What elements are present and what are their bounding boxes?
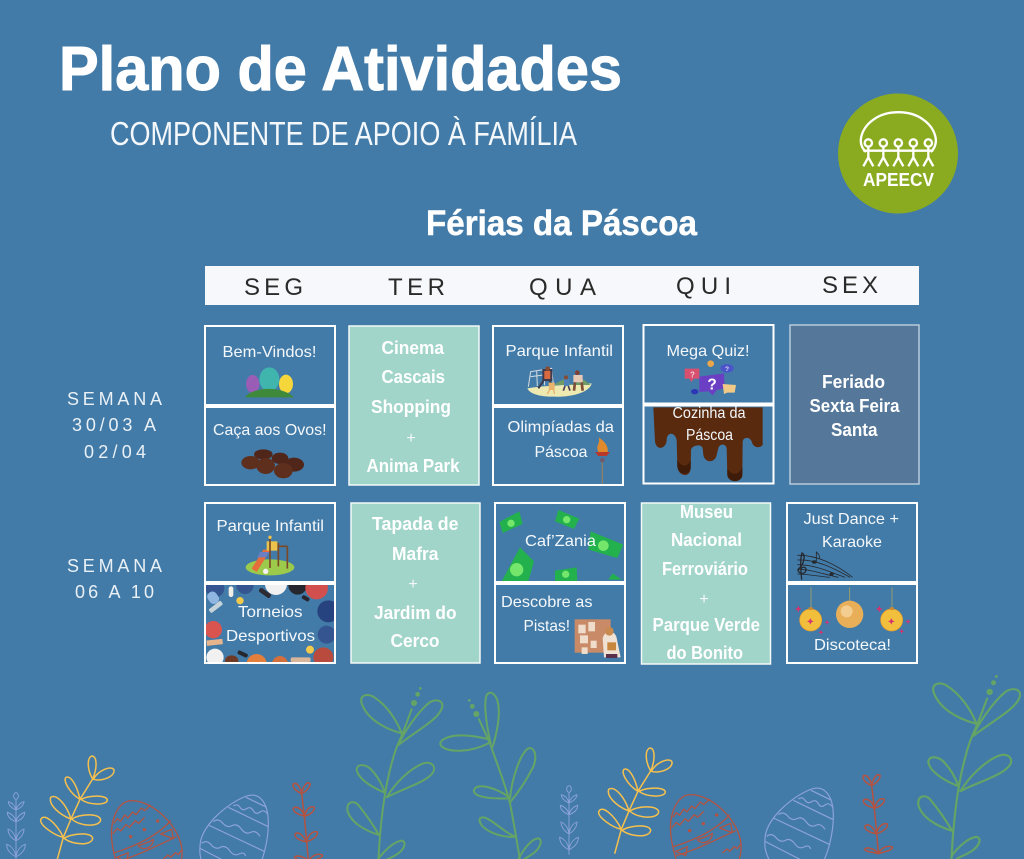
cell: Caça aos Ovos (205, 407, 335, 485)
cell: Museu Nacional Ferroviário + Parque Verde do Bonito: Nacional (671, 530, 742, 550)
weekday header bar: SEG (244, 274, 303, 301)
egg: red right (671, 795, 741, 859)
cell: Descobre as Pistas (495, 584, 625, 663)
cell: Caf'Zania: Caf’Zania (525, 533, 596, 550)
cell: Descobre as Pistas: Descobre as (501, 594, 592, 611)
cell: Cinema Cascais Shopping + Anima Park: Anima Park (366, 456, 460, 476)
cell: Mega Quiz (644, 325, 774, 404)
subtitle: COMPONENTE DE APOIO À FAMÍLIA (110, 115, 577, 152)
cell: Just Dance + Karaoke (787, 503, 917, 582)
cell: Olimpíadas da Páscoa: Páscoa (534, 444, 588, 461)
cell: Cinema Cascais Shopping + Anima Park (349, 326, 479, 485)
cell: Museu Nacional Ferroviário + Parque Verde do Bonito: Ferroviário (662, 559, 748, 579)
logo: APEECV: APEECV (863, 170, 934, 190)
week label: 30/03 a 02/04: 02/04 (84, 442, 146, 462)
egg: red left (112, 801, 182, 859)
plant: lavender right (560, 786, 578, 855)
cell: Torneios Desportivos (204, 583, 336, 664)
weekday header bar: QUI (676, 273, 731, 300)
cell: Olimpíadas da Páscoa: Olimpíadas da (508, 419, 614, 436)
week label: 30/03 a 02/04: SEMANA (67, 389, 162, 409)
cell: Parque Infantil (semana 1): Parque Infantil (506, 343, 613, 360)
cell: Just Dance + Karaoke: Just Dance + (804, 511, 899, 528)
icon: sports balls frame (206, 585, 334, 662)
cell: Feriado Sexta Feira Santa: Feriado (822, 372, 885, 392)
plant: green left (347, 687, 442, 859)
cell: Discoteca: Discoteca! (814, 637, 891, 654)
cell: Cozinha da Páscoa: Páscoa (686, 427, 733, 444)
egg: blue right (765, 788, 833, 859)
icon: playground (246, 536, 294, 575)
plant: yellow right (599, 748, 672, 854)
week label: 06 a 10: 06 A 10 (75, 582, 154, 602)
icon: question bubbles: ? (725, 366, 729, 373)
cell: Just Dance + Karaoke: Karaoke (822, 534, 882, 551)
cell: Caça aos Ovos: Caça aos Ovos! (213, 422, 326, 439)
cell: Tapada de Mafra + Jardim do Cerco: + (408, 576, 418, 593)
weekday header bar: TER (388, 274, 445, 301)
icon: painted eggs (245, 367, 294, 397)
cell: Torneios Desportivos: Desportivos (226, 628, 315, 645)
cell: Bem-Vindos (205, 326, 335, 405)
plant: green right (918, 675, 1020, 859)
cell: Olimpíadas da Páscoa (493, 407, 623, 485)
cell: Tapada de Mafra + Jardim do Cerco (351, 503, 480, 663)
cell: Museu Nacional Ferroviário + Parque Verde do Bonito (642, 502, 770, 664)
cell: Feriado Sexta Feira Santa: Sexta Feira (810, 396, 900, 416)
plant: yellow left (41, 756, 114, 859)
icon: flying banknotes (499, 510, 623, 581)
plant: green leaning (440, 693, 541, 859)
title: Plano de Atividades (59, 35, 622, 104)
cell: Mega Quiz: Mega Quiz! (666, 343, 750, 360)
cell: Cinema Cascais Shopping + Anima Park: Cascais (382, 367, 445, 387)
cell: Cozinha da Páscoa: Cozinha da (672, 405, 746, 422)
icon: detective evidence board (575, 619, 621, 658)
logo: APEECV (838, 94, 958, 214)
cell: Museu Nacional Ferroviário + Parque Verde do Bonito: do Bonito (666, 643, 743, 663)
cell: Parque Infantil (semana 2) (205, 503, 335, 582)
plant: red sprig left (293, 783, 322, 859)
week label: 06 a 10: SEMANA (67, 556, 162, 576)
cell: Cinema Cascais Shopping + Anima Park: + (406, 430, 416, 447)
cell: Cinema Cascais Shopping + Anima Park: Shopping (371, 397, 451, 417)
cell: Feriado Sexta Feira Santa: Santa (831, 420, 878, 440)
icon: chocolate drip (653, 407, 763, 481)
icon: question bubbles (685, 360, 736, 395)
cell: Parque Infantil (semana 1) (493, 326, 623, 405)
icon: question bubbles: ? (707, 376, 717, 393)
week label: 06 a 10 (67, 556, 162, 602)
cell: Tapada de Mafra + Jardim do Cerco: Cerco (390, 631, 440, 651)
cell: Descobre as Pistas: Pistas! (524, 618, 570, 635)
weekday header bar: QUA (529, 274, 596, 301)
cell: Torneios Desportivos: Torneios (238, 604, 302, 621)
cell: Cozinha da Páscoa (644, 405, 774, 484)
cell: Tapada de Mafra + Jardim do Cerco: Tapada de (372, 514, 458, 534)
plant: red sprig right (863, 775, 892, 854)
cell: Museu Nacional Ferroviário + Parque Verde do Bonito: Parque Verde (652, 615, 760, 635)
icon: question bubbles: ? (690, 370, 695, 379)
decoration: plants and Easter eggs (7, 675, 1020, 859)
icon: olympic torch (595, 437, 610, 484)
icon: music staff (797, 552, 853, 580)
egg: blue left (200, 795, 268, 859)
cell: Museu Nacional Ferroviário + Parque Verde do Bonito: Museu (680, 502, 733, 522)
weekday header bar: SEX (822, 272, 878, 299)
cell: Discoteca (787, 584, 917, 663)
cell: Feriado Sexta Feira Santa (790, 325, 919, 484)
cell: Tapada de Mafra + Jardim do Cerco: Jardim do (374, 603, 456, 623)
week label: 30/03 a 02/04 (67, 389, 162, 462)
plant: lavender left (7, 793, 25, 859)
icon: disco balls (795, 587, 911, 635)
heading: Férias da Páscoa: Férias da Páscoa (426, 204, 698, 243)
cell: Parque Infantil (semana 2): Parque Infantil (216, 518, 324, 535)
weekday header bar (205, 266, 919, 305)
cell: Caf'Zania (495, 503, 625, 582)
cell: Bem-Vindos: Bem-Vindos! (222, 344, 316, 361)
icon: chocolate eggs (241, 449, 304, 478)
icon: family playing football (527, 366, 592, 397)
cell: Tapada de Mafra + Jardim do Cerco: Mafra (392, 544, 439, 564)
week label: 30/03 a 02/04: 30/03 A (72, 415, 156, 435)
cell: Museu Nacional Ferroviário + Parque Verde do Bonito: + (699, 591, 709, 608)
cell: Cinema Cascais Shopping + Anima Park: Cinema (382, 338, 445, 358)
